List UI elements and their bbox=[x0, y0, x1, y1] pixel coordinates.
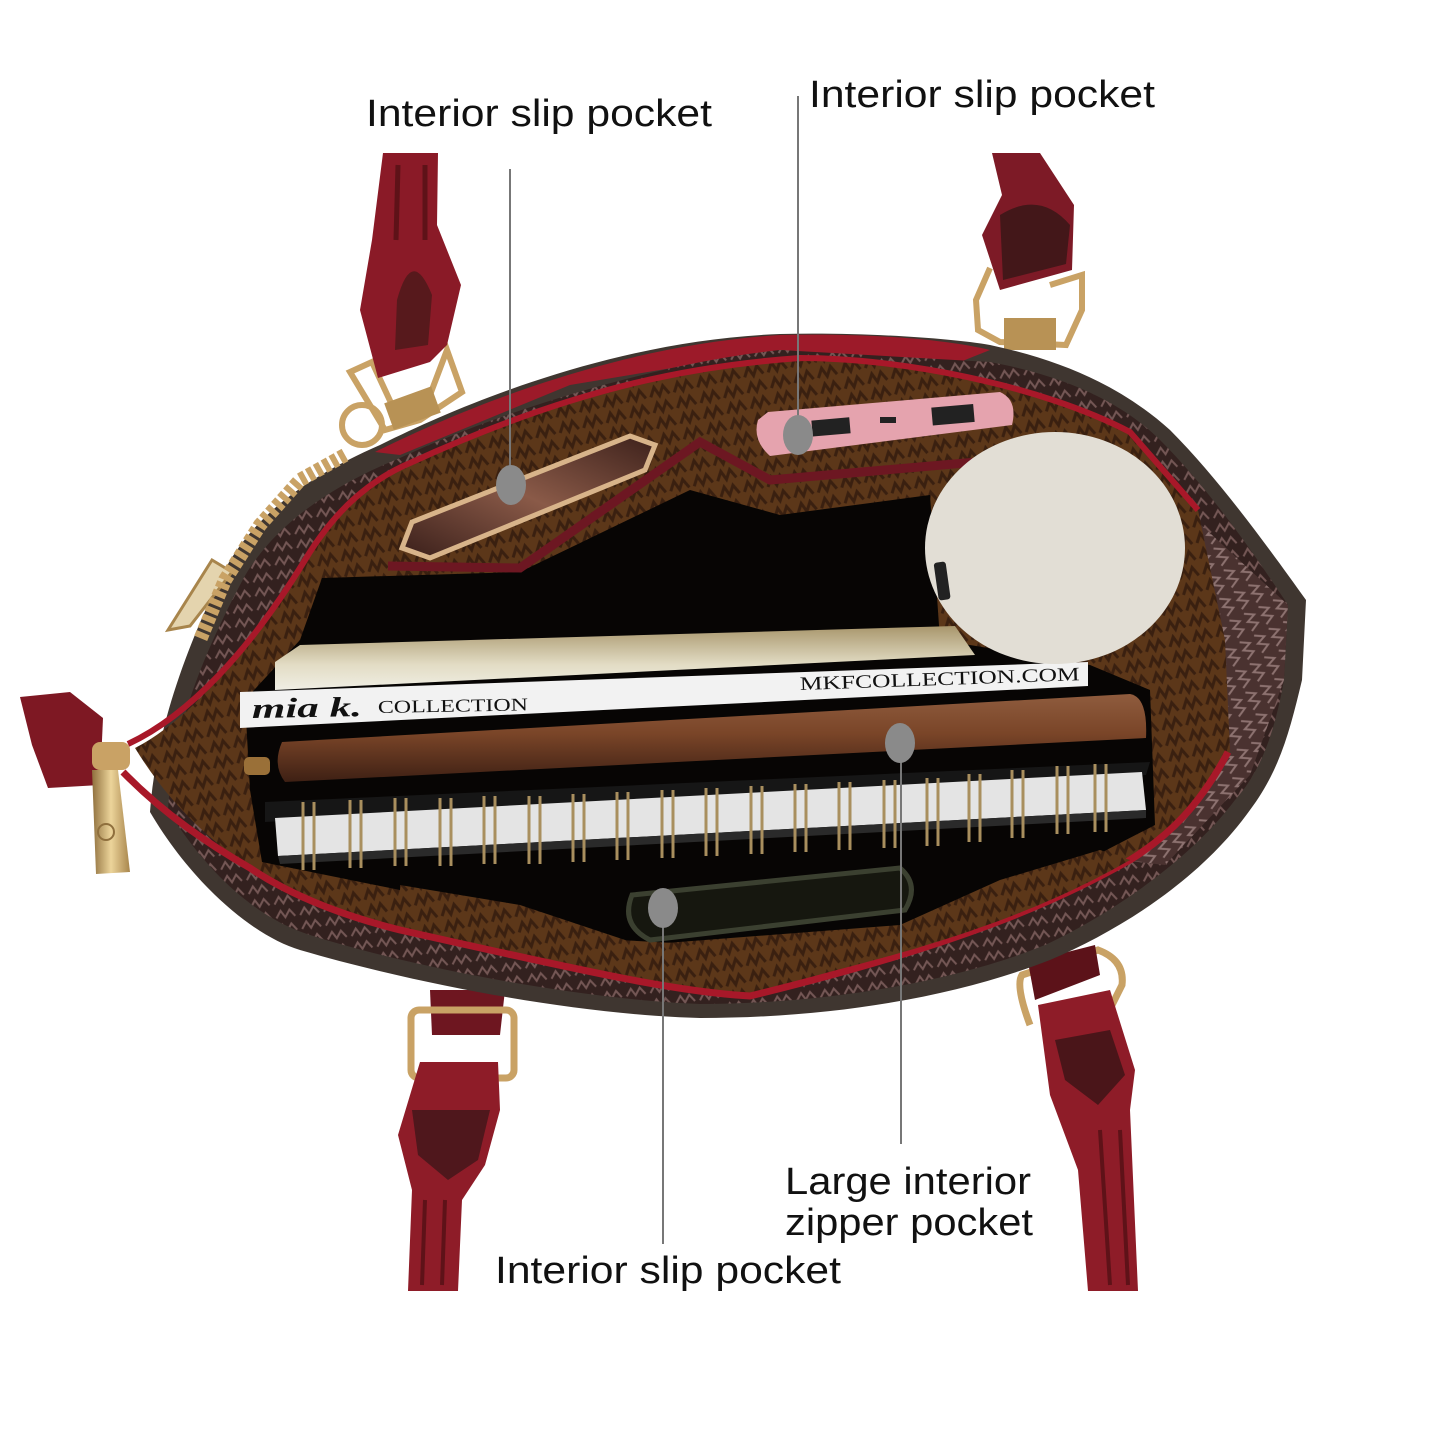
red top binding bbox=[375, 335, 990, 455]
book: mia k collection: mia k. bbox=[252, 692, 362, 725]
callout: bottom slip pocket bbox=[495, 888, 841, 1292]
book: mia k collection bbox=[240, 662, 1088, 728]
power bank bbox=[756, 392, 1014, 456]
zip tag bbox=[244, 757, 270, 775]
handle: bottom right bbox=[1020, 945, 1138, 1291]
callout: bottom slip pocket: Interior slip pocket bbox=[495, 1250, 841, 1292]
pocket: slip pocket edge bbox=[388, 442, 1000, 568]
bottom zipper bbox=[123, 752, 1228, 996]
copper zipper pouch bbox=[278, 694, 1146, 782]
bag lining band bbox=[168, 350, 1288, 1004]
callout: top right slip pocket bbox=[783, 74, 1155, 455]
callout: left slip pocket bbox=[366, 93, 712, 505]
handle: bottom left bbox=[398, 990, 514, 1291]
callout: top right slip pocket: Interior slip pocket bbox=[809, 74, 1155, 116]
phone in left pocket bbox=[402, 436, 655, 558]
bag body outer rim bbox=[150, 334, 1306, 1018]
callout: left slip pocket: Interior slip pocket bbox=[366, 93, 712, 135]
green wristlet bbox=[629, 868, 911, 940]
zipper pull bbox=[92, 742, 130, 874]
callout: large zipper pocket: Large interior bbox=[785, 1161, 1031, 1203]
book: mia k collection: MKFCOLLECTION.COM bbox=[799, 664, 1080, 695]
notebook spiral rings bbox=[303, 764, 1106, 870]
top zipper bbox=[128, 358, 1198, 744]
right lining panel bbox=[1120, 510, 1288, 865]
dark interior cavity bbox=[245, 490, 1155, 950]
handle: top left bbox=[350, 153, 462, 430]
lower brown pocket bbox=[400, 850, 1130, 990]
handle: top right bbox=[976, 153, 1082, 350]
bag interior lining bbox=[135, 358, 1230, 996]
zipper tab bbox=[20, 692, 103, 788]
callout: large zipper pocket bbox=[785, 723, 1033, 1244]
round white disc bbox=[925, 432, 1185, 664]
callout: large zipper pocket: zipper pocket bbox=[785, 1202, 1033, 1244]
charm and chain bbox=[168, 386, 441, 640]
spiral notebook bbox=[265, 762, 1150, 870]
flat phone bbox=[275, 626, 975, 690]
book: mia k collection: COLLECTION bbox=[378, 694, 528, 717]
